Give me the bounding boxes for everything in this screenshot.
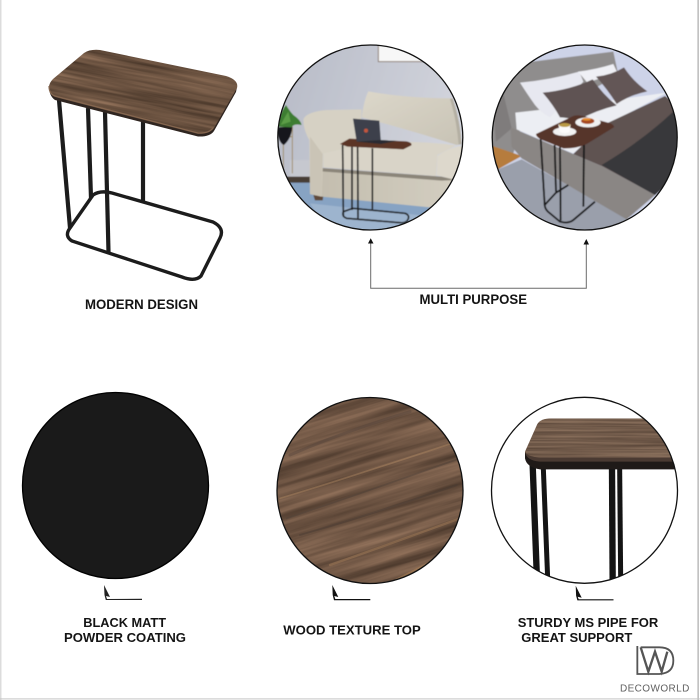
circle photo: bedroom scene bbox=[487, 40, 683, 237]
table legs bbox=[541, 138, 595, 223]
legs bbox=[533, 465, 621, 582]
table top edge bbox=[49, 85, 237, 137]
headboard bbox=[490, 52, 618, 153]
table legs bbox=[343, 145, 409, 223]
table base frame bbox=[67, 192, 221, 279]
logo wordmark: DECOWORLD bbox=[620, 684, 689, 695]
sofa back pillow bbox=[362, 91, 462, 145]
sofa base bbox=[321, 171, 452, 208]
rug bbox=[290, 182, 432, 216]
label: sturdy ms pipe: STURDY MS PIPE FOR bbox=[518, 615, 659, 630]
seat cushions bbox=[323, 142, 456, 176]
heading: multi purpose: MULTI PURPOSE bbox=[420, 292, 527, 307]
product photo: side table bbox=[48, 50, 238, 281]
label: sturdy ms pipe bbox=[518, 615, 659, 645]
plant bbox=[277, 105, 302, 173]
arrow: sturdy pipe bbox=[576, 586, 614, 600]
label: black matt powder coating: BLACK MATT bbox=[83, 615, 166, 630]
floor bbox=[493, 146, 521, 170]
laptop bbox=[353, 119, 381, 143]
arrow: black matt bbox=[104, 585, 142, 600]
bed base bbox=[511, 127, 655, 219]
table top bbox=[536, 115, 614, 148]
picture frame bbox=[377, 46, 424, 63]
circle photo: table detail bbox=[492, 397, 690, 583]
logo mark bbox=[637, 646, 673, 674]
blanket bbox=[573, 96, 674, 193]
swatch: black matt bbox=[22, 392, 208, 578]
dark pillows bbox=[543, 79, 617, 121]
mattress bbox=[515, 93, 667, 153]
heading: modern design: MODERN DESIGN bbox=[85, 297, 198, 312]
label: black matt powder coating: POWDER COATING bbox=[64, 630, 186, 645]
table top bbox=[340, 139, 412, 149]
plate with cake bbox=[575, 117, 601, 127]
swatch: wood texture bbox=[276, 396, 464, 584]
logo: decoworld bbox=[620, 646, 689, 695]
white pillows bbox=[520, 71, 584, 110]
arrow: wood texture bbox=[332, 585, 370, 600]
label: wood texture top: WOOD TEXTURE TOP bbox=[283, 622, 421, 638]
label: sturdy ms pipe: GREAT SUPPORT bbox=[521, 630, 632, 645]
table top bbox=[49, 50, 238, 134]
arrow connector: multi purpose bbox=[368, 238, 589, 288]
label: black matt powder coating bbox=[64, 615, 186, 645]
sofa arm bbox=[303, 109, 362, 197]
coffee cup bbox=[553, 127, 576, 136]
table edge bbox=[525, 452, 687, 469]
rug bbox=[498, 159, 628, 230]
table legs bbox=[59, 100, 143, 252]
table top bbox=[525, 418, 671, 458]
circle photo: sofa scene bbox=[273, 40, 470, 237]
